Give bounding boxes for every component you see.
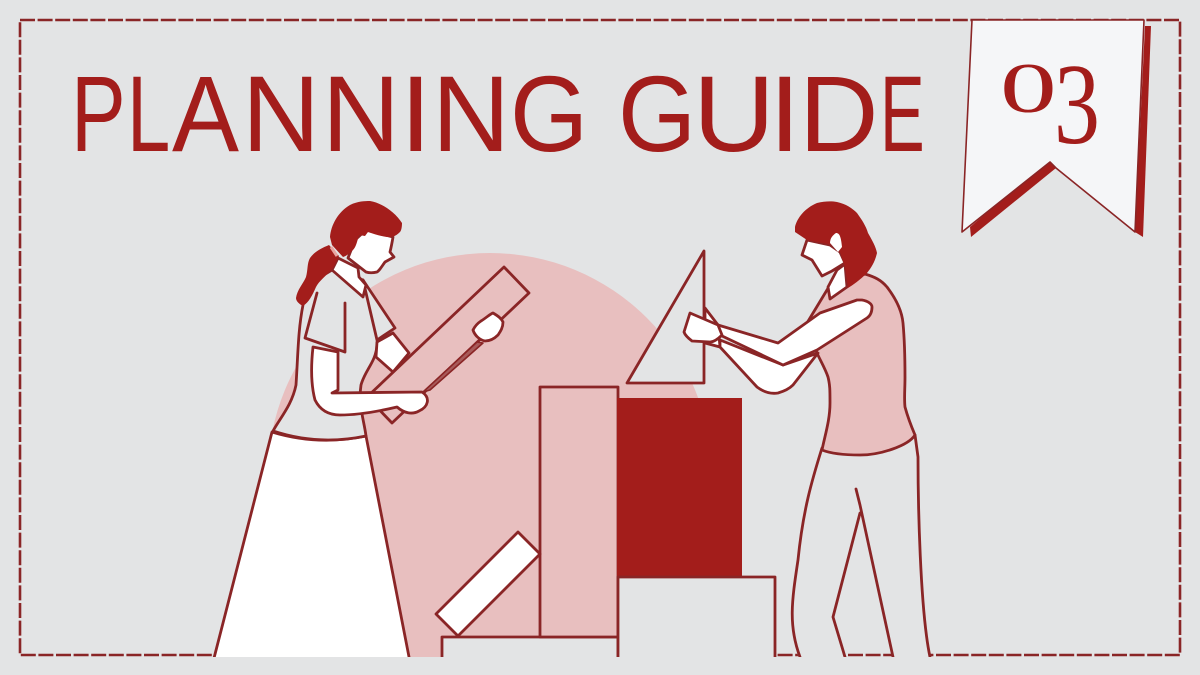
title: G (618, 53, 696, 174)
neck (828, 264, 847, 299)
title: P (71, 53, 126, 174)
title: G (510, 53, 588, 174)
box: tall pink (540, 387, 618, 637)
title: D (799, 53, 879, 174)
front sleeve (305, 293, 345, 352)
figure: left woman (213, 201, 529, 662)
ruler board (367, 267, 529, 423)
boxes stack (436, 387, 775, 662)
box: lower right (618, 577, 775, 662)
title: I (769, 53, 801, 174)
ribbon badge (962, 20, 1151, 237)
figure: right woman (684, 201, 930, 662)
title: N (432, 53, 510, 174)
face (802, 240, 845, 276)
pants (792, 435, 930, 662)
triangle ruler (627, 251, 704, 383)
upper arm (718, 300, 872, 365)
white tilted bar (436, 532, 540, 636)
fingers behind triangle (705, 308, 720, 347)
face (348, 230, 394, 273)
front arm (312, 347, 427, 415)
collar (332, 258, 366, 297)
upper arm (376, 333, 409, 372)
title (71, 53, 925, 174)
skirt (213, 432, 410, 662)
hair band (331, 247, 337, 256)
title: I (400, 53, 432, 174)
title: N (322, 53, 400, 174)
hair (330, 201, 402, 257)
box: lower left (442, 637, 618, 662)
shirt (807, 274, 915, 455)
back sleeve (363, 280, 395, 340)
ponytail (296, 245, 339, 306)
lower arm (720, 340, 818, 393)
shirt (273, 270, 377, 440)
title: L (127, 53, 170, 174)
badge number (1000, 41, 1100, 168)
background circle (268, 253, 712, 657)
title: A (172, 53, 239, 174)
bottom strip (0, 657, 1200, 675)
hand on ruler (473, 313, 503, 341)
title: N (242, 53, 320, 174)
hand (684, 313, 722, 342)
badge number: 0 (1000, 50, 1057, 128)
hair (795, 201, 877, 288)
title: U (693, 53, 775, 174)
ear (830, 233, 842, 252)
forearm to hand (423, 342, 483, 392)
box: dark red (617, 398, 742, 579)
badge number: 3 (1054, 41, 1100, 168)
title: E (880, 53, 925, 174)
